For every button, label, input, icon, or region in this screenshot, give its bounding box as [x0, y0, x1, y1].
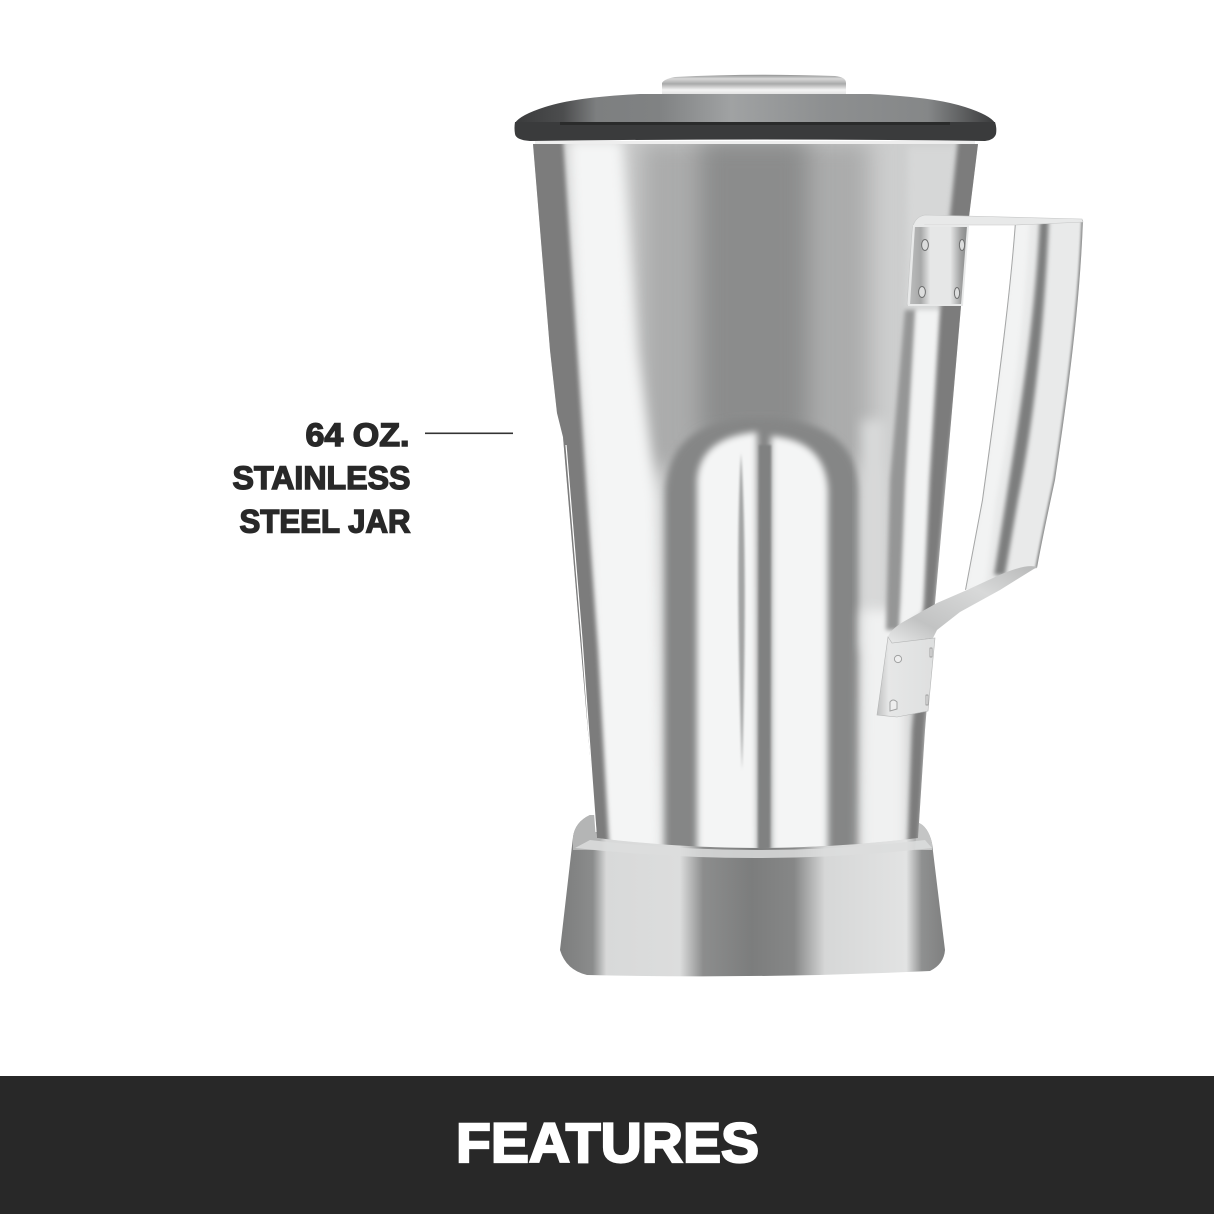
callout: 64 oz. stainless steel jar	[232, 417, 513, 540]
handle top bar	[907, 215, 1083, 305]
features banner	[0, 1076, 1214, 1214]
callout: 64 oz. stainless steel jar: 64 OZ.	[306, 417, 410, 453]
jar body	[520, 140, 990, 860]
jar base lip	[575, 840, 932, 858]
jar base	[560, 815, 945, 976]
jar edge highlight	[566, 445, 596, 832]
lid knob	[662, 75, 846, 95]
callout: 64 oz. stainless steel jar: STAINLESS	[232, 460, 410, 496]
lower mounting plate	[877, 637, 935, 717]
callout: 64 oz. stainless steel jar: STEEL JAR	[240, 504, 410, 540]
lid	[514, 94, 996, 141]
handle grip	[965, 220, 1083, 590]
upper mounting plate	[909, 226, 968, 305]
arch reflection	[665, 418, 860, 860]
handle lower arm	[888, 566, 1037, 643]
blender jar illustration	[514, 75, 1090, 976]
jar top rim	[535, 141, 975, 144]
banner heading: FEATURES	[456, 1111, 759, 1174]
handle	[877, 215, 1090, 717]
